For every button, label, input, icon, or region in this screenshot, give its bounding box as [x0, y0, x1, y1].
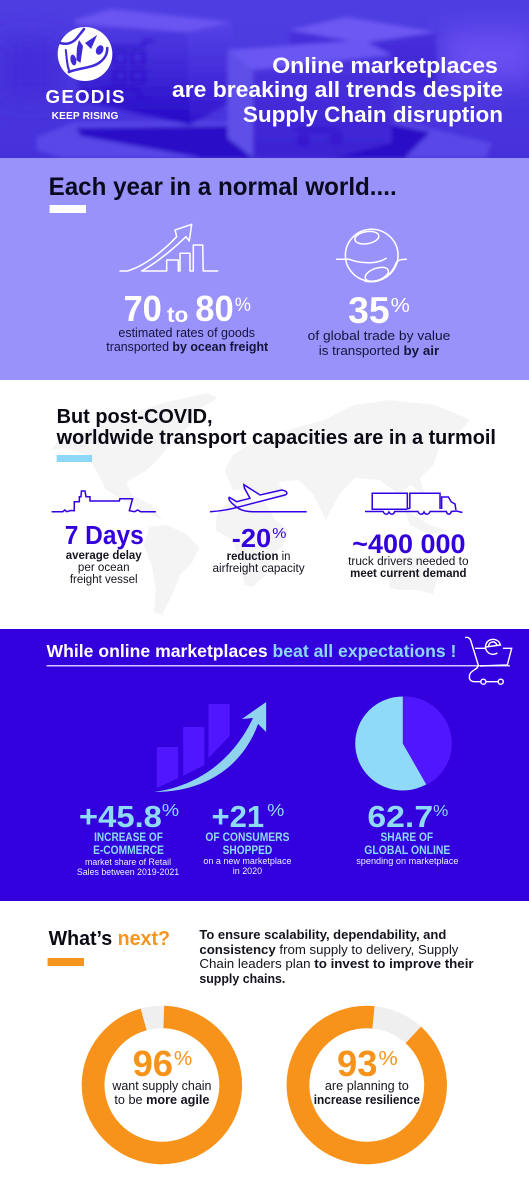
caption: increase resilience: are planning to	[325, 1078, 409, 1093]
stat: 93%: %	[378, 1048, 398, 1070]
stat: 21%: +21	[212, 799, 264, 834]
caption: airfreight: airfreight capacity	[213, 561, 305, 575]
world map background	[51, 393, 471, 615]
stat: -20%	[232, 523, 286, 553]
stat: 93%: 93	[337, 1043, 377, 1084]
icon: shopping cart	[465, 637, 512, 684]
icon: plane	[210, 485, 307, 512]
intro paragraph: supply chains.	[199, 972, 285, 986]
stat: 7 days: 7 Days	[65, 520, 144, 550]
caption: average delay	[66, 548, 142, 586]
caption: truck drivers	[348, 554, 469, 580]
stat: 21%: %	[267, 800, 284, 820]
caption: share of global online: SHARE OF	[381, 830, 433, 844]
caption: truck drivers: meet current demand	[350, 566, 467, 580]
stat: 96%: %	[174, 1048, 192, 1070]
icon: truck	[365, 493, 462, 514]
title: are breaking all trends despite	[172, 77, 503, 102]
stat: 96%	[133, 1043, 192, 1084]
stat: 400 000 drivers: ~400 000	[352, 528, 466, 559]
panel: what's next	[0, 901, 529, 1200]
stat: 62.7%: 62.7	[367, 799, 433, 834]
caption: air	[308, 329, 450, 358]
stat: 35%: %	[391, 295, 410, 317]
heading	[56, 406, 496, 449]
stat: 70 to 80%: %	[235, 295, 251, 316]
heading: While online marketplaces beat all expectations !	[47, 641, 456, 661]
tagline: KEEP RISING	[52, 111, 119, 122]
intro paragraph: consistency from supply to delivery, Supply	[199, 943, 459, 957]
stat: 70 to 80%: 70	[123, 288, 162, 329]
caption: consumers: in 2020	[233, 866, 262, 877]
stat: 70 to 80%: 80	[195, 288, 234, 329]
caption: share of global online: GLOBAL ONLINE	[364, 843, 450, 857]
caption: ocean freight: estimated rates of goods	[118, 326, 255, 340]
caption: air: is transported by air	[319, 344, 439, 358]
stat: -20%: -20	[232, 523, 271, 553]
stat: 62.7%: %	[433, 802, 448, 820]
intro paragraph: To ensure scalability, dependability, and	[199, 928, 446, 942]
icon: growth chart with arrow	[119, 224, 218, 271]
caption: average delay: average delay	[66, 548, 142, 562]
caption: more agile: want supply chain	[111, 1078, 212, 1093]
caption: more agile	[111, 1078, 212, 1107]
caption: airfreight: reduction in	[227, 549, 290, 563]
heading: worldwide transport capacities are in a turmoil	[56, 427, 496, 449]
heading: What’s next?	[49, 928, 170, 950]
caption: truck drivers: truck drivers needed to	[348, 554, 469, 568]
title	[172, 53, 503, 127]
stat: 96%: 96	[133, 1043, 173, 1084]
caption: increase resilience: increase resilience	[314, 1092, 420, 1107]
panel: each year in a normal world	[0, 158, 529, 380]
stat: 93%	[337, 1043, 398, 1084]
caption: average delay: per ocean	[78, 560, 130, 574]
pie chart	[355, 696, 452, 790]
caption: e-commerce: INCREASE OF	[94, 830, 163, 844]
caption: consumers: on a new marketplace	[203, 856, 291, 867]
caption: air: of global trade by value	[308, 329, 450, 343]
heading: Each year in a normal world....	[49, 173, 397, 201]
caption: e-commerce: market share of Retail	[85, 857, 171, 868]
caption: consumers: SHOPPED	[223, 843, 272, 857]
caption: share of global online	[356, 830, 458, 867]
caption: share of global online: spending on marketplace	[356, 856, 458, 867]
wordmark: GEODIS	[46, 86, 124, 107]
caption: ocean freight: transported by ocean freight	[106, 340, 269, 354]
background photo of parcels	[0, 9, 529, 158]
heading accent bar	[50, 205, 86, 213]
caption: airfreight	[213, 549, 305, 575]
title: Online marketplaces	[272, 53, 498, 78]
cart print on parcels	[101, 41, 340, 144]
stat: 45.8%: %	[162, 800, 179, 820]
caption: more agile: to be more agile	[114, 1092, 209, 1107]
caption: e-commerce: E-COMMERCE	[93, 843, 164, 857]
GEODIS logo	[46, 27, 124, 122]
caption: consumers	[203, 830, 291, 877]
stat: 45.8%: +45.8	[79, 799, 162, 834]
caption: increase resilience	[314, 1078, 420, 1107]
icon: ship	[52, 491, 156, 512]
stat: 35%: 35	[348, 289, 390, 331]
heading accent bar	[57, 455, 92, 462]
intro paragraph: Chain leaders plan to invest to improve their	[199, 957, 474, 971]
donut chart: 93%	[269, 989, 464, 1181]
heading rule	[47, 665, 510, 666]
caption: consumers: OF CONSUMERS	[205, 830, 289, 844]
donut chart: 96%	[91, 1015, 233, 1155]
caption: e-commerce: Sales between 2019-2021	[77, 867, 179, 878]
panel: header banner	[0, 0, 529, 158]
heading: But post-COVID,	[57, 406, 213, 428]
stat: -20%: %	[272, 525, 286, 542]
caption: average delay: freight vessel	[70, 572, 138, 586]
bar chart with arrow	[154, 702, 266, 792]
intro paragraph	[199, 928, 474, 986]
panel: online marketplaces	[0, 629, 529, 901]
stat: 70 to 80%: to	[167, 304, 188, 327]
panel: post-COVID transport capacities	[0, 380, 529, 629]
stat: 35%	[348, 289, 410, 331]
stat: 70 to 80%	[123, 288, 251, 329]
caption: ocean freight	[106, 326, 269, 354]
title: Supply Chain disruption	[243, 102, 503, 127]
caption: e-commerce	[77, 830, 179, 878]
icon: globe with orbit line	[336, 229, 407, 284]
heading accent bar	[48, 958, 84, 966]
